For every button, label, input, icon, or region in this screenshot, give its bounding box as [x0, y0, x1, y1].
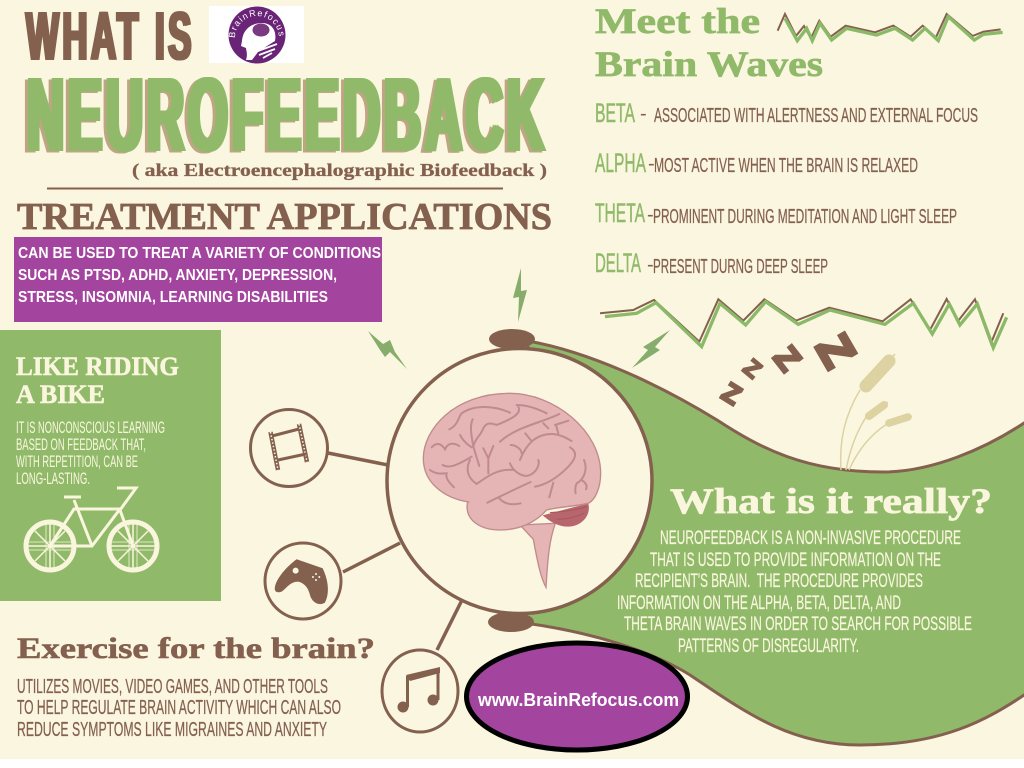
- website oval: www.BrainRefocus.com: [477, 690, 679, 710]
- icon: brain: [423, 393, 601, 587]
- heading: like riding a bike: LIKE RIDING: [16, 352, 179, 381]
- panel: conditions: STRESS, INSOMNIA, LEARNING DISABILITIES: [18, 289, 328, 306]
- icon: bicycle: [26, 488, 157, 570]
- text: exercise description: TO HELP REGULATE BRAIN ACTIVITY WHICH CAN ALSO: [17, 697, 341, 719]
- icon: music note: [398, 667, 440, 712]
- delta: PRESENT DURNG DEEP SLEEP: [653, 256, 828, 278]
- alpha: [595, 148, 918, 178]
- sleeping z letters: Z: [767, 339, 808, 378]
- title: what is: WHAT IS: [25, 0, 190, 74]
- heading: like riding a bike: [16, 352, 179, 409]
- text: exercise description: REDUCE SYMPTOMS LIKE MIGRAINES AND ANXIETY: [17, 719, 327, 741]
- icon: film strip: [270, 424, 307, 470]
- heading: what is it really: What is it really?: [670, 481, 992, 521]
- text: bike description: BASED ON FEEDBACK THAT,: [16, 435, 146, 454]
- sleeping z letters: Z: [738, 354, 766, 384]
- theta: -: [647, 204, 654, 226]
- title: neurofeedback: NEUROFEEDBACK: [27, 58, 544, 173]
- top node: [489, 329, 535, 349]
- panel: conditions: [14, 237, 382, 322]
- theta: THETA: [595, 198, 645, 228]
- central circle with brain: [387, 348, 652, 614]
- heading: meet the brain waves: Brain Waves: [595, 44, 823, 84]
- bottom node: [488, 612, 534, 632]
- heading: exercise for the brain: Exercise for the brain?: [17, 632, 375, 665]
- text: what is it really description: [617, 528, 972, 657]
- logo: BrainRefocus: [228, 10, 284, 38]
- sleeping z letters: Z: [807, 325, 866, 376]
- panel: like riding a bike: [0, 330, 221, 601]
- title: neurofeedback: NEUROFEEDBACK: [22, 59, 539, 174]
- icon: lightning left: [368, 331, 407, 369]
- website oval: [466, 643, 688, 750]
- panel: conditions: CAN BE USED TO TREAT A VARIETY OF CONDITIONS: [18, 245, 381, 262]
- logo: [209, 6, 304, 64]
- text: exercise description: UTILIZES MOVIES, VIDEO GAMES, AND OTHER TOOLS: [17, 676, 328, 698]
- text: what is it really description: PATTERNS OF DISREGULARITY.: [678, 636, 859, 657]
- icon: lightning right: [632, 330, 670, 368]
- top brain wave: [778, 14, 1003, 41]
- sleeping z letters: Z: [717, 377, 746, 411]
- text: exercise description: [17, 676, 341, 741]
- alpha: ALPHA: [595, 148, 646, 178]
- bottom brain wave: [600, 299, 1007, 348]
- heading: meet the brain waves: Meet the: [595, 1, 760, 41]
- title: neurofeedback: NEUROFEEDBACK: [25, 58, 542, 173]
- icon: lightning top: [513, 268, 527, 322]
- brain wave list: [595, 98, 978, 278]
- theta: [595, 198, 957, 228]
- icon: game controller: [275, 559, 328, 604]
- title: neurofeedback: NEUROFEEDBACK: [25, 59, 542, 174]
- alpha: -: [648, 153, 655, 175]
- title: what is: WHAT IS: [27, 0, 192, 74]
- connector lines: [328, 453, 462, 650]
- text: bike description: [16, 418, 165, 488]
- subtitle: ( aka Electroencephalographic Biofeedback ): [132, 160, 547, 180]
- delta: [595, 248, 828, 278]
- beta: BETA: [595, 98, 635, 128]
- reeds: [841, 354, 912, 470]
- delta: -: [647, 254, 654, 276]
- beta: [595, 98, 978, 128]
- game controller circle: [265, 543, 341, 619]
- text: bike description: WITH REPETITION, CAN BE: [16, 452, 138, 471]
- heading: like riding a bike: A BIKE: [16, 380, 105, 409]
- heading: treatment applications: TREATMENT APPLICATIONS: [17, 196, 552, 238]
- film circle: [250, 410, 328, 486]
- sleeping z letters: [717, 325, 866, 411]
- text: bike description: IT IS NONCONSCIOUS LEARNING: [16, 418, 165, 437]
- heading: meet the brain waves: [595, 1, 823, 84]
- panel: conditions: SUCH AS PTSD, ADHD, ANXIETY, DEPRESSION,: [18, 267, 337, 284]
- delta: DELTA: [595, 248, 641, 278]
- beta: -: [640, 103, 647, 125]
- green flowing panel: [525, 341, 1024, 745]
- music circle: [382, 650, 458, 732]
- text: bike description: LONG-LASTING.: [16, 469, 90, 488]
- title: neurofeedback: NEUROFEEDBACK: [29, 58, 546, 173]
